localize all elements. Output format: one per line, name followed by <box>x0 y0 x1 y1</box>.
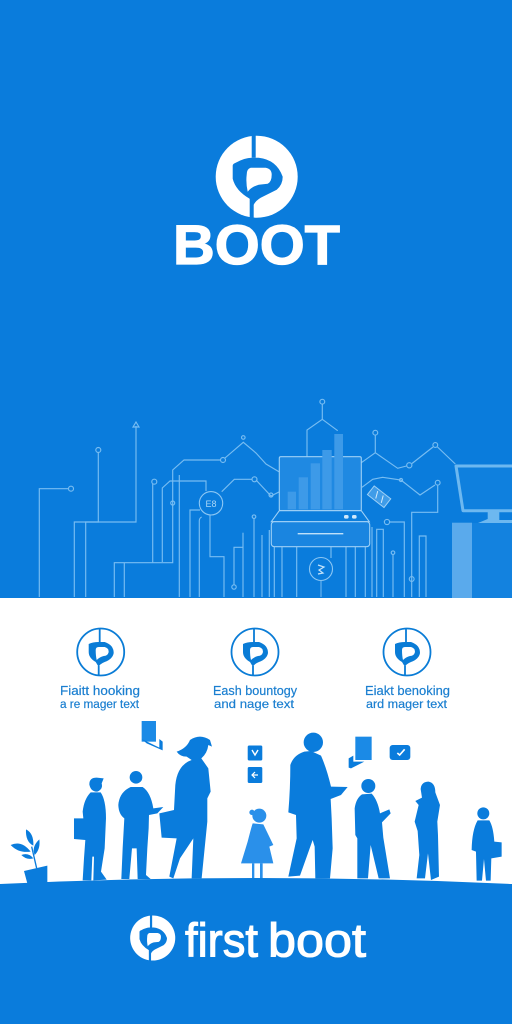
desk right <box>472 523 512 598</box>
icon: footer emblem <box>130 915 175 961</box>
text: feature label 3: Eiakt benoking <box>365 684 450 698</box>
logo: main boot emblem and wordmark <box>173 135 340 276</box>
text: feature label 1: Fiaitt hooking <box>60 684 140 698</box>
illustration: woman talking <box>415 782 440 880</box>
illustration: man talking <box>355 779 391 878</box>
text: feature label 1 <box>60 684 140 711</box>
bar chart <box>288 434 343 509</box>
tile one <box>248 746 262 760</box>
printer front <box>271 522 370 547</box>
icon: circuit badge with glyphs <box>199 492 223 515</box>
icon: circuit badge with glyphs: E8 <box>205 499 217 509</box>
panel: white middle background <box>0 598 512 898</box>
illustration: monitor on desk <box>452 466 512 598</box>
illustration: woman with bag <box>159 737 212 878</box>
heading: BOOT: BOOT <box>173 213 340 276</box>
slot <box>298 533 343 534</box>
illustration: person with bag <box>74 778 107 880</box>
logo: firstboot footer <box>130 914 366 966</box>
desk left <box>452 523 472 598</box>
panel: blue ground footer <box>0 878 512 1024</box>
icon: feature logo 3 <box>384 628 430 676</box>
icon: feature logo 2 <box>232 628 278 676</box>
laptop screen <box>279 457 361 511</box>
illustration: tall man <box>288 733 348 878</box>
icon: feature logo 1 <box>77 628 124 676</box>
monitor frame <box>456 466 512 511</box>
text: feature label 2 <box>213 684 298 711</box>
panel: blue hero background <box>0 0 512 598</box>
printer base <box>271 511 369 522</box>
text: feature label 2: Eash bountogy <box>213 684 298 698</box>
text: feature label 3: ard mager text <box>366 699 448 711</box>
text: feature label 1: a re mager text <box>60 699 140 711</box>
icon: floating document left <box>142 721 163 750</box>
illustration: plant <box>11 829 47 883</box>
icon: small circuit badge <box>310 558 332 597</box>
icon: check badge <box>390 745 410 760</box>
icon: floating document right <box>349 737 372 768</box>
icon: tilted tag <box>367 486 391 508</box>
buttons <box>344 515 349 519</box>
chart: circuit line network <box>39 399 455 597</box>
illustration: person gesturing <box>118 771 163 879</box>
text: first wordmark: first <box>185 914 258 966</box>
text: feature label 3 <box>365 684 450 711</box>
monitor stand <box>478 511 512 523</box>
illustration: child with bag <box>472 807 502 881</box>
illustration: laptop with bar chart <box>271 434 370 547</box>
icon: boot emblem <box>216 135 298 219</box>
illustration: child in dress <box>241 809 273 880</box>
text: boot wordmark: boot <box>268 914 366 966</box>
text: feature label 2: and nage text <box>214 697 295 711</box>
icon: floating tiles <box>248 746 262 783</box>
tile two <box>248 767 262 783</box>
